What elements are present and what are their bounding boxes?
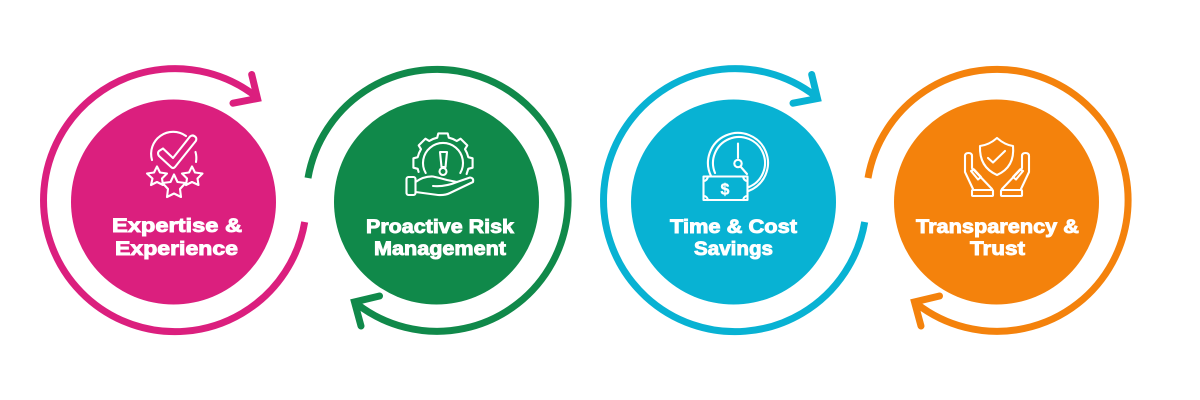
ring arrow: blue xyxy=(604,69,865,332)
label: Proactive Risk Management: Management xyxy=(374,239,507,260)
label: Time & Cost Savings xyxy=(670,217,798,260)
label: Time & Cost Savings: Time & Cost xyxy=(670,217,798,238)
disc: pink xyxy=(71,100,276,304)
panel: expertise and experience xyxy=(44,69,305,332)
ring arrow: green xyxy=(308,69,568,331)
label: Transparency & Trust xyxy=(916,217,1079,260)
icon: shield in hands xyxy=(965,138,1029,196)
panel: proactive risk management xyxy=(308,69,568,331)
icon: dollar sign: $ xyxy=(720,182,730,198)
label: Proactive Risk Management xyxy=(366,217,514,260)
label: Expertise & Experience: Experience xyxy=(115,239,238,260)
disc: blue xyxy=(631,100,836,304)
label: Time & Cost Savings: Savings xyxy=(694,239,773,260)
label: Proactive Risk Management: Proactive Risk xyxy=(366,217,514,238)
icon: gear, warning and hand xyxy=(406,133,473,195)
ring arrow: pink xyxy=(44,69,305,332)
label: Transparency & Trust: Transparency & xyxy=(916,217,1079,238)
icon: check mark and stars xyxy=(147,132,202,197)
ring arrow: orange xyxy=(868,69,1128,331)
label: Transparency & Trust: Trust xyxy=(970,239,1026,260)
panel: transparency and trust xyxy=(868,69,1128,331)
label: Expertise & Experience: Expertise & xyxy=(112,216,242,237)
icon: clock and banknote xyxy=(704,133,768,200)
panel: time and cost savings xyxy=(604,69,865,332)
label: Expertise & Experience xyxy=(112,216,242,260)
disc: green xyxy=(334,100,539,304)
disc: orange xyxy=(894,100,1099,304)
